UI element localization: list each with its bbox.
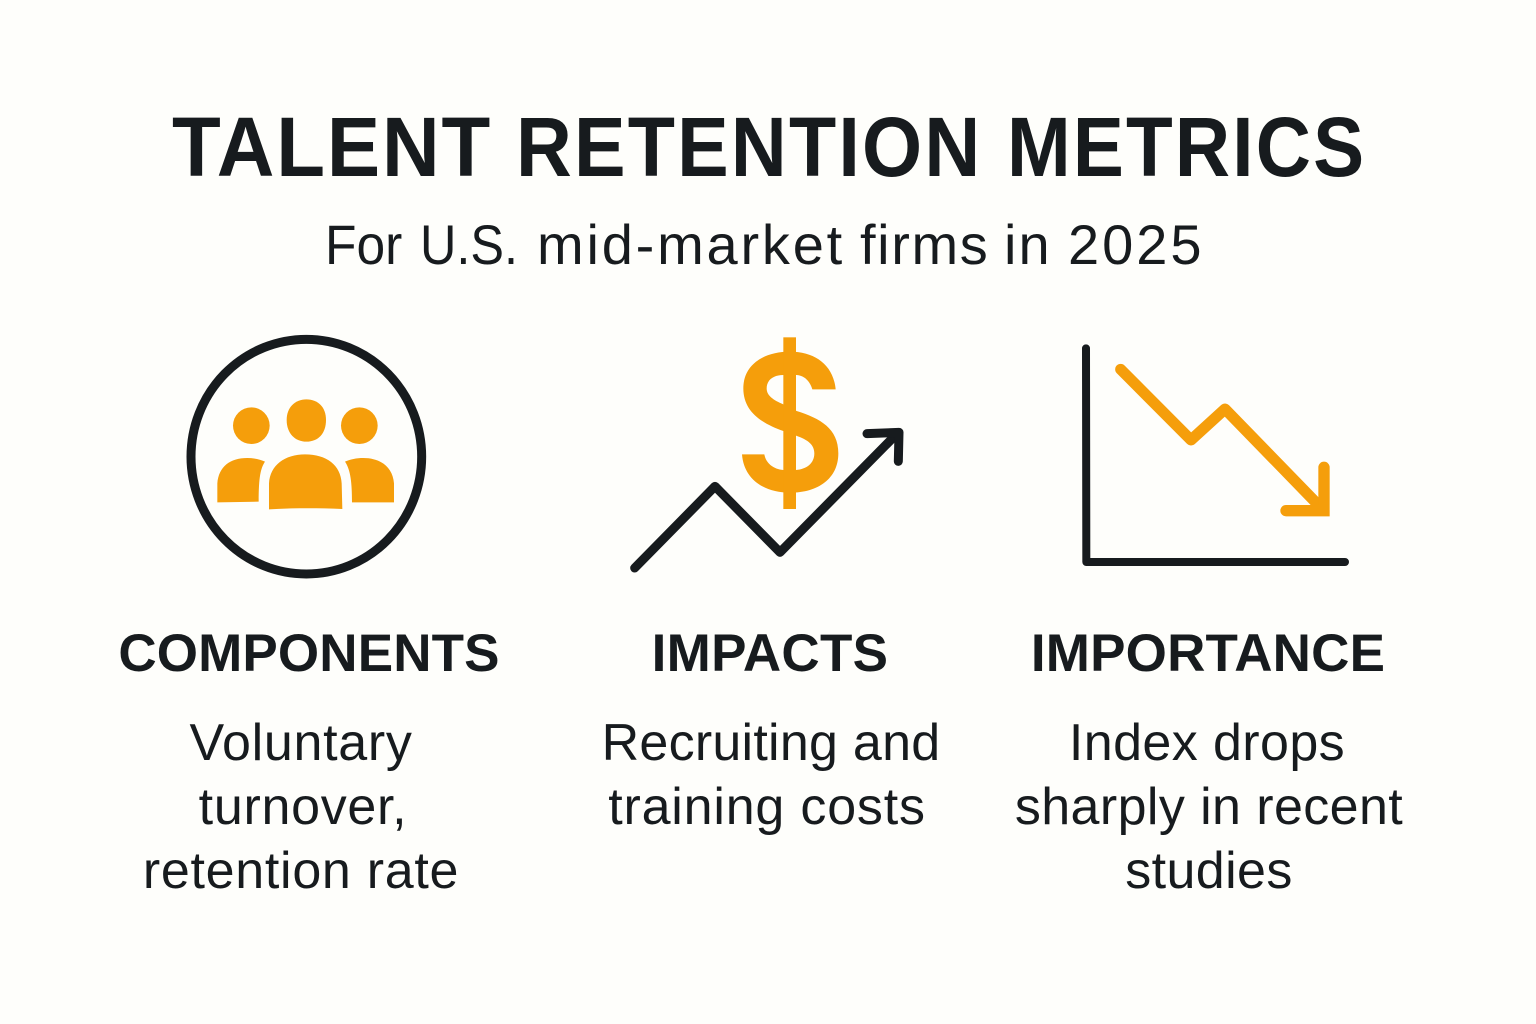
subtitle: firms — [860, 213, 989, 276]
text: importance description: studies — [1125, 842, 1293, 900]
icon: dollar sign with rising arrow — [630, 337, 904, 572]
subtitle: mid-market — [537, 213, 845, 276]
subtitle: U.S. — [420, 213, 518, 276]
subtitle: in — [1004, 213, 1052, 276]
title: TALENT — [172, 100, 492, 194]
text: importance description — [1015, 714, 1403, 900]
icon: team in circle — [186, 334, 426, 578]
title — [172, 100, 1366, 194]
text: components description: turnover, — [199, 778, 407, 836]
subtitle: 2025 — [1068, 213, 1205, 276]
title: RETENTION — [516, 100, 982, 194]
title: METRICS — [1007, 100, 1366, 194]
subtitle — [325, 213, 1205, 276]
heading: importance: IMPORTANCE — [1031, 624, 1385, 683]
text: components description — [143, 714, 459, 900]
text: impacts description — [602, 714, 940, 836]
text: impacts description: training costs — [608, 778, 926, 836]
text: components description: retention rate — [143, 842, 459, 900]
text: components description: Voluntary — [189, 714, 413, 772]
text: importance description: Index drops — [1069, 714, 1345, 772]
heading: impacts: IMPACTS — [652, 624, 888, 683]
subtitle: For — [325, 213, 402, 276]
text: impacts description: Recruiting and — [602, 714, 940, 772]
text: importance description: sharply in recent — [1015, 778, 1403, 836]
heading: components: COMPONENTS — [118, 624, 500, 683]
icon: falling line chart — [1082, 344, 1349, 566]
